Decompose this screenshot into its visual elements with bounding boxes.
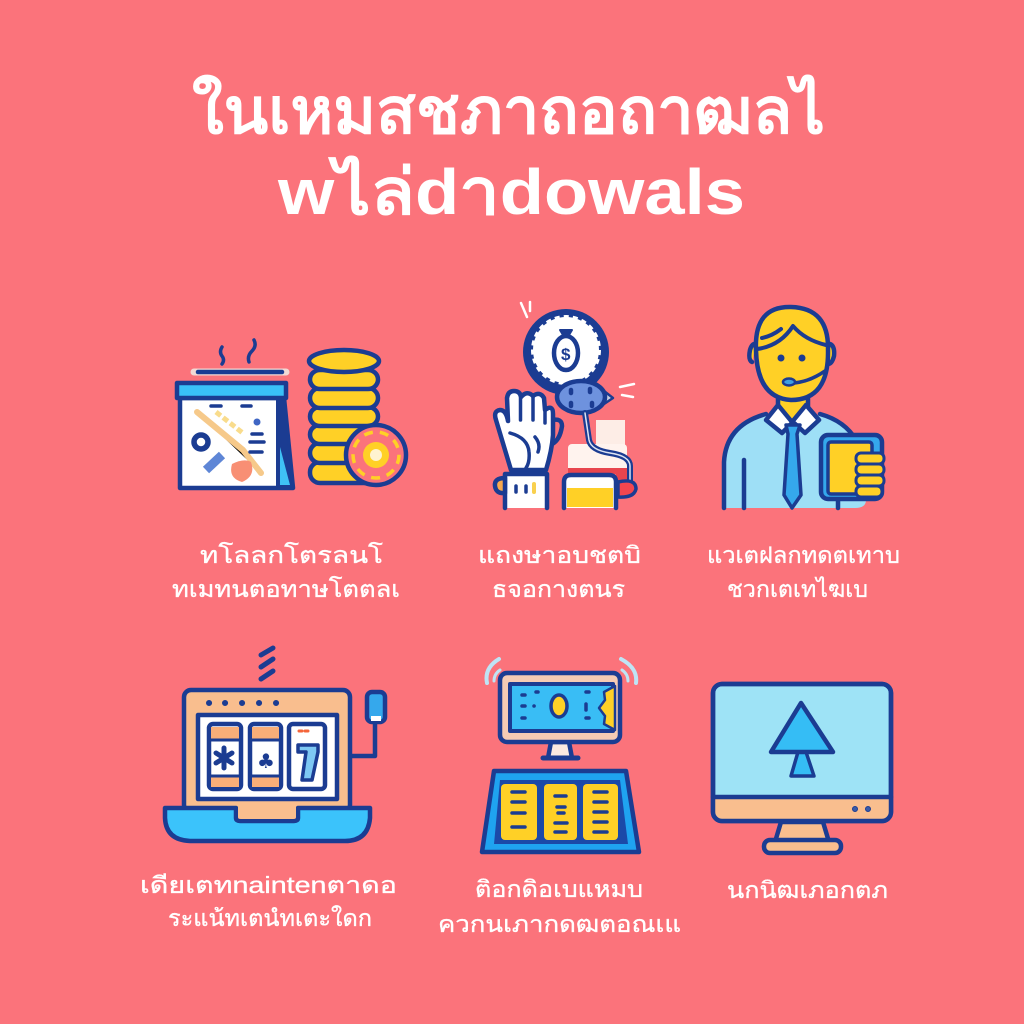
caption 1: ทโลลกโตรลนโ [200,542,383,568]
title: ในเหมสชภาถอถาฒลไ [192,74,825,147]
keypad columns [501,784,618,840]
tie [784,425,801,508]
plug [557,381,613,413]
monitor body [713,684,891,821]
caption 3: ชวกเตเทไฆเบ [727,576,868,602]
icon: hand, money badge and plug [495,302,636,508]
cable [585,413,630,482]
wifi arcs [486,659,636,683]
icon: calendar with coins [177,340,406,488]
laptop notch fill [238,806,296,819]
reel 1 [209,724,241,789]
laptop base [165,808,370,841]
laptop screen [184,690,350,812]
coin stack [309,350,379,483]
jar [564,475,616,508]
icon: laptop slot machine [165,648,385,841]
caption 5 [438,876,681,937]
slot panel [198,715,337,799]
stand [775,822,829,842]
calendar page [177,383,293,488]
caption 1 [172,542,400,602]
signal strokes [261,648,273,679]
icon: support agent [724,307,884,508]
monitor frame [500,673,620,742]
caption 1: ทเมทนตอทาษโตตลเ [172,576,400,602]
body [724,414,866,508]
icon: monitor with triangle symbol [713,684,891,853]
sparks [521,302,634,397]
head [749,307,834,400]
reel 2 [250,724,281,789]
poker chip [346,425,406,485]
caption 4 [140,872,397,931]
stand [548,742,572,758]
caption 4: เดียเตทnaintenตาดอ [140,872,397,898]
hand [495,391,562,470]
caption 2: แถงษาอบชตบิ [478,542,641,568]
caption 3: แวเตฝลกทดตเทาบ [707,542,900,568]
money badge: $ [561,345,571,364]
money badge [523,309,609,395]
indicator dots [209,700,276,706]
caption 2 [478,542,641,602]
stand base [764,840,841,853]
neck [778,395,808,428]
caption 3 [707,542,900,602]
reel 2: ♣ [257,749,275,773]
title: wไล่dาdowals [277,155,745,228]
calendar hanger bar [194,368,286,376]
triangle symbol [771,703,833,776]
collar [766,405,819,433]
steam lines [220,340,255,364]
caption 5: ควกนเภากดฒตอณเแ [438,911,681,937]
caption 2: ธจอกางตนร [492,576,625,602]
phone in hand [821,435,884,499]
paper and box [568,420,629,492]
caption 6: นกนิฒเภอกตภ [727,877,888,903]
title [192,74,825,228]
caption 4: ระแน้ทเตนํทเตะใดก [168,905,372,931]
icon: monitor and keypad [482,659,639,852]
wrist cuff [495,474,547,508]
keypad [482,771,639,852]
reel 3 [289,724,325,789]
monitor screen [510,684,615,731]
lever [352,692,385,756]
caption 5: ติอกดิอเบแหมบ [475,876,643,902]
round knob [618,481,636,497]
